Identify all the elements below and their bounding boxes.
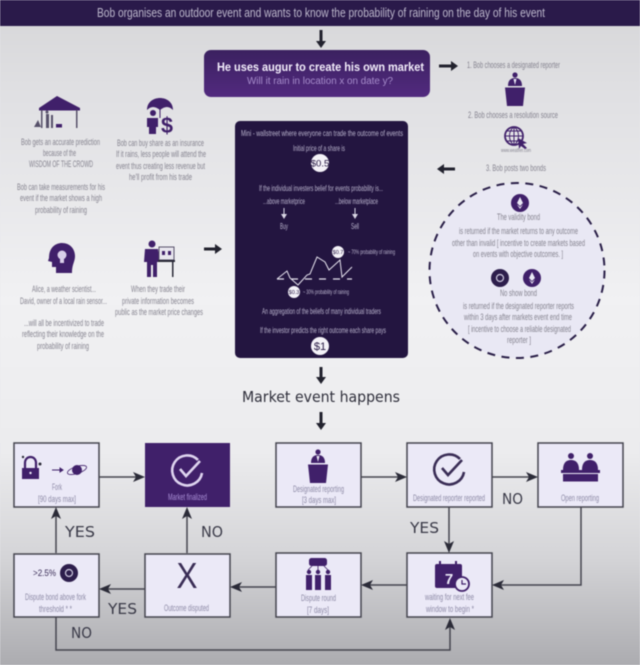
icon: crowd and speech board [306,558,331,590]
box: outcome disputed: X [176,555,198,596]
icon: calendar with clock: 7 [445,571,453,588]
panel: bonds circle: on events with objective outcomes. ] [473,249,563,259]
icon: coin [60,564,78,582]
panel: Bob's setup steps: 3. Bob posts two bonds [486,163,546,173]
box: designated reporter reported: Designated reporter reported [413,493,485,503]
text block: wisdom of the crowd [17,137,105,215]
panel: bonds circle: The validity bond [497,212,540,222]
line chart: market price: ~ 30% probability of raining [303,289,349,296]
text block: local traders: reflecting their knowledge on the [22,329,104,339]
label: NO: NO [502,490,523,508]
box: designated reporter reported [407,443,492,507]
box: waiting for next fee window [407,553,492,617]
icon: no show bond, reputation [491,269,509,287]
box: waiting for next fee window: window to begin * [425,604,474,614]
panel: mini wallstreet: Sell [351,221,359,231]
text block: insurance: Bob can buy share as an insurance [117,138,204,148]
panel: bonds circle: is returned if the designated reporter reports [463,301,574,311]
arrow: sell [352,208,358,219]
icon: head with light bulb [48,243,75,273]
panel: mini wallstreet: Initial price of a share is [293,143,345,153]
panel: bonds circle [430,183,604,358]
text block: insurance: event thus creating less revenue but [116,161,205,171]
panel: mini wallstreet: Mini - wallstreet where everyone can trade the outcome of events [241,128,403,138]
box: designated reporting [276,443,361,507]
box: open reporting: Open reporting [561,493,599,503]
text block: wisdom of the crowd: because of the [43,148,76,158]
line chart: market price: $0.7 [333,250,343,256]
panel: Bob's setup steps [467,60,560,173]
text block: insurance: If it rains, less people will attend the [116,149,206,159]
box: fork: [90 days max] [38,494,76,504]
icon: trader at desk [144,240,175,277]
text block: wisdom of the crowd: event if the market shows a high [20,193,102,203]
arrow: bonds to market panel [437,164,455,174]
box: dispute bond: >2.5% [33,568,56,578]
line chart: market price: $0.3 [289,290,299,296]
icon: no show bond, ether [523,269,541,287]
text block: private information: When they trade their [131,284,185,294]
panel: mini wallstreet: ...above marketprice [263,196,305,206]
icon: padlock [22,456,42,479]
line chart: market price: ~ 70% probability of raining [348,249,395,256]
panel: Bob's setup steps: 2. Bob chooses a resolution source [468,110,558,120]
text block: local traders: probability of raining [37,341,89,351]
box: dispute round [276,553,361,617]
box: dispute bond: Dispute bond above fork [25,592,86,602]
box: outcome disputed: Outcome disputed [164,603,209,613]
box: dispute bond [14,554,99,617]
label: YES: YES [64,523,95,541]
connector lines and arrows [51,472,581,650]
panel: mini wallstreet: If the individual investers belief for events probability is... [259,183,383,193]
panel: create market: Will it rain in location x on date y? [247,76,393,87]
text block: private information: public as the market price changes [115,307,203,317]
label: NO: NO [201,523,223,541]
box: outcome disputed [145,554,230,617]
icon: fork arrow [52,468,63,472]
text block: wisdom of the crowd: probability of raining [35,205,87,215]
icon: gazebo [34,96,80,128]
box: dispute bond: threshold * * [39,604,72,614]
icon: planet [66,464,88,476]
label: YES: YES [107,600,137,618]
box: fork: Fork [52,482,62,492]
text block: wisdom of the crowd: WISDOM OF THE CROWD [29,159,93,169]
panel: mini wallstreet: ...below marketplace [335,196,378,206]
box: dispute round: [7 days] [307,605,329,615]
price badge: payout: $1 [314,341,326,353]
box: fork [14,443,99,507]
panel: create market: He uses augur to create his own market [217,60,424,74]
line chart: market price [277,246,395,298]
box: open reporting [538,443,623,507]
box: market finalized: Market finalized [168,492,207,502]
arrow: buy [281,208,287,219]
icon: umbrella and dollar [147,98,173,138]
text block: local traders: ...will all be incentivized to trade [24,318,104,328]
arrow: event to flowchart [316,412,326,430]
box: designated reporting: Designated reporting [293,484,344,494]
text block: wisdom of the crowd: Bob can take measurements for his [17,182,105,192]
panel: mini wallstreet: If the investor predicts the right outcome each share pays [260,325,386,335]
arrow: panel to event [316,367,326,384]
panel: bonds circle: reporter ] [507,335,531,345]
panel: Bob's setup steps: www.weather.com [500,148,531,154]
icon: two reporters at a desk [561,453,600,482]
text block: insurance: he'll profit from his trade [129,172,192,182]
heading: market event happens: Market event happens [242,388,400,406]
panel: create market [204,50,430,97]
panel: mini wallstreet: Buy [280,221,288,231]
box: dispute round: Dispute round [301,593,336,603]
price badge: initial [311,154,329,172]
panel: bonds circle: [ incentive to choose a reliable designated [468,324,571,334]
label: YES: YES [409,519,439,537]
panel: bonds circle: No show bond [500,288,537,298]
arrow: to step list [439,61,458,71]
panel: mini wallstreet: An aggregation of the beliefs of many individual traders [262,306,381,316]
icon: umbrella and dollar: $ [161,113,173,138]
text block: wisdom of the crowd: Bob gets an accurate prediction [21,137,100,147]
text block: insurance [116,138,206,182]
title banner [0,0,640,26]
arrow: to market panel [204,244,222,254]
arrow: banner to market box [316,30,326,48]
text block: local traders [20,284,107,351]
box: market finalized [145,443,230,507]
box: designated reporting: [3 days max] [302,495,336,505]
panel: mini wallstreet [235,121,408,358]
text block: private information: private information becomes [122,296,194,306]
price badge: payout [311,337,329,355]
text block: private information [115,284,203,317]
label: NO: NO [71,624,92,642]
panel: Bob's setup steps: 1. Bob chooses a designated reporter [467,60,560,70]
text block: local traders: Alice, a weather scientist... [32,284,96,294]
price badge: initial: $0.5 [311,158,329,170]
text block: local traders: David, owner of a local rain sensor... [20,296,107,306]
panel: bonds circle: within 3 days after markets event end time [463,312,572,322]
box: waiting for next fee window: waiting for next fee [424,592,474,602]
icon: validity bond [511,194,529,212]
